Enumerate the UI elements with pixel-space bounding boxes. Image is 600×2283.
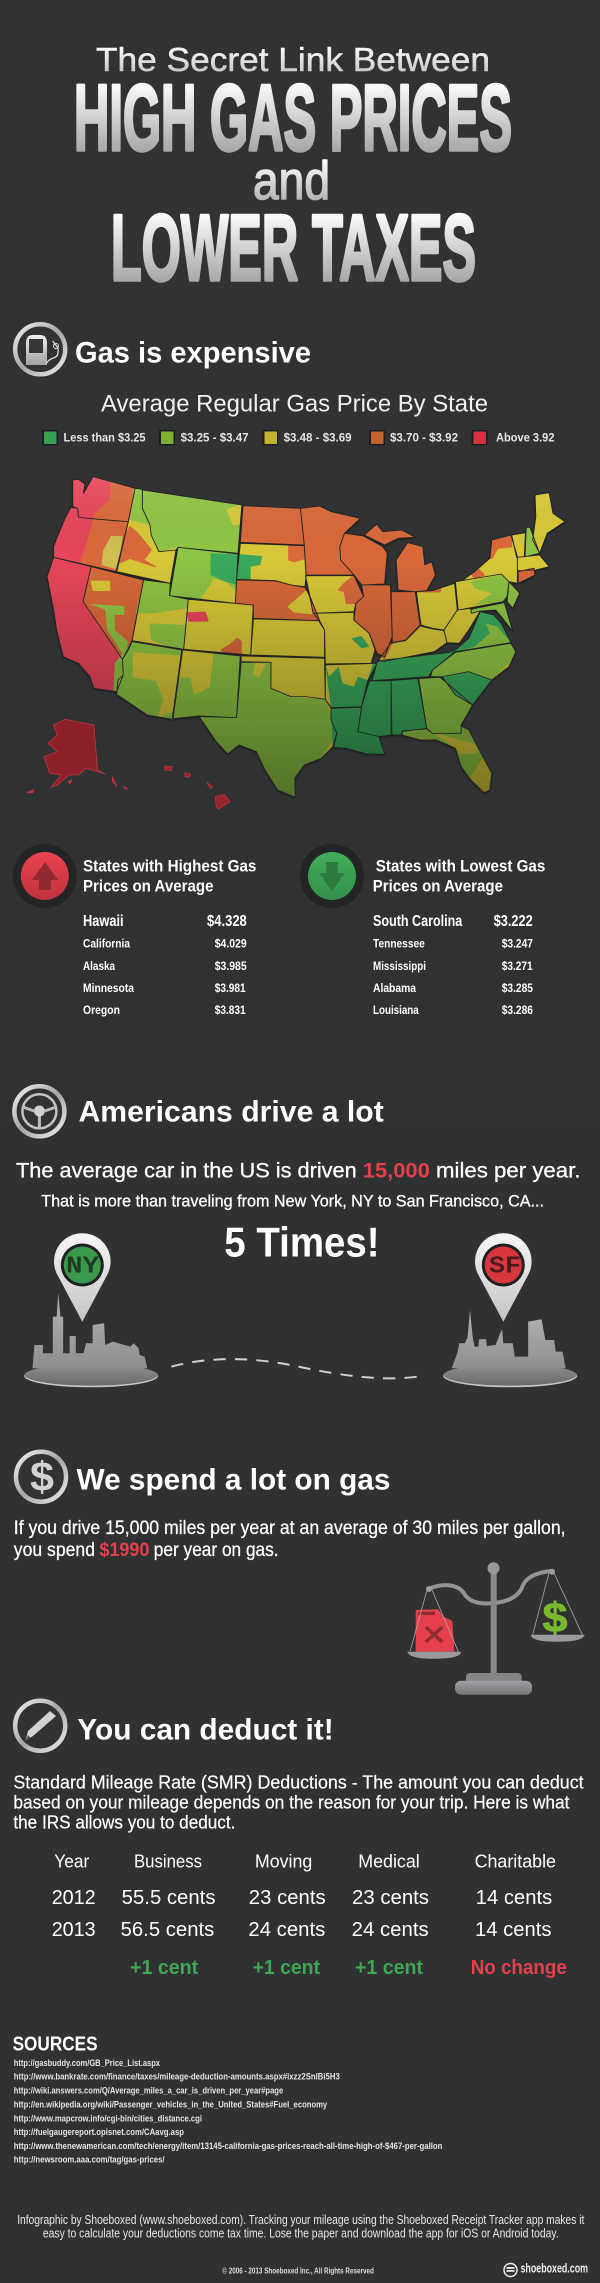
text: annual gas spend: you spend [14, 1540, 95, 1561]
panel: states with lowest gas prices [300, 844, 545, 1017]
table row 2013 [52, 1919, 551, 1941]
list: lowest states and prices: $3.285 [502, 981, 533, 995]
legend item: above 3.92: Above 3.92 [496, 430, 555, 444]
logo: shoeboxed [504, 2262, 588, 2276]
heading: we spend a lot on gas: We spend a lot on gas [76, 1463, 390, 1496]
heading: sources: SOURCES [13, 2034, 98, 2056]
heading: highest gas prices [83, 857, 256, 896]
icon: ny map pin: NY [66, 1254, 100, 1280]
map title: Average Regular Gas Price By State [101, 391, 488, 418]
icon: red gas can [416, 1609, 454, 1652]
legend item: 3.48 to 3.69: $3.48 - $3.69 [284, 430, 352, 444]
table header row: Charitable [475, 1851, 556, 1871]
list: lowest states and prices: $3.247 [502, 937, 533, 951]
list: highest states and prices: Minnesota [83, 981, 134, 995]
panel: sources [13, 2034, 442, 2165]
legend item: 3.25 to 3.47 [159, 430, 249, 446]
text: average car driven miles: miles per year. [436, 1159, 580, 1182]
icon: pencil [15, 1701, 65, 1751]
list: source urls: http://gasbuddy.com/GB_Price_List.aspx [14, 2058, 160, 2068]
heading: highest gas prices: Prices on Average [83, 877, 214, 896]
icon: red up arrow button [13, 844, 77, 908]
list: highest states and prices: $3.831 [215, 1003, 246, 1017]
title [74, 41, 512, 300]
legend item: less than 3.25: Less than $3.25 [64, 430, 146, 444]
map: us gas prices by state [26, 476, 566, 810]
icon: ny map pin [54, 1233, 111, 1322]
illustration: balance scale [407, 1562, 585, 1695]
list: source urls: http://www.bankrate.com/finance/taxes/mileage-deduction-amounts.aspx#ixzz2SnlBi5H3 [14, 2072, 340, 2082]
heading: gas is expensive: Gas is expensive [75, 337, 311, 370]
legend item: above 3.92 [472, 430, 555, 446]
panel: gas is expensive [12, 322, 566, 810]
legend item: 3.48 to 3.69 [262, 430, 352, 446]
illustration: new york skyline [24, 1293, 158, 1387]
list: lowest states and prices: Alabama [373, 981, 416, 995]
list: highest states and prices: $3.985 [215, 959, 247, 973]
text: standard mileage rate explanation: based on your mileage depends on the reason for your trip. Here is what [13, 1792, 569, 1812]
list: source urls: http://fuelgaugereport.opisnet.com/CAavg.asp [14, 2127, 184, 2137]
text: shoeboxed credit [17, 2212, 585, 2240]
text: average car driven miles: The average car in the US is driven [16, 1159, 357, 1182]
table row change [130, 1957, 567, 1979]
text: annual gas spend: $1990 [100, 1540, 149, 1561]
icon: gas pump [15, 324, 65, 374]
legend item: less than 3.25 [42, 430, 146, 446]
table row 2012 [52, 1887, 552, 1909]
illustration: san francisco skyline [443, 1310, 577, 1387]
list: highest states and prices: Alaska [83, 959, 115, 973]
arrow: dashed route [171, 1359, 418, 1378]
table row 2013: 2013 [52, 1919, 96, 1941]
text: 5 times: 5 Times! [224, 1219, 380, 1266]
table header row: Medical [358, 1851, 420, 1871]
list: lowest states and prices: $3.286 [502, 1003, 533, 1017]
text: standard mileage rate explanation [13, 1772, 584, 1832]
list: source urls: http://wiki.answers.com/Q/Average_miles_a_car_is_driven_per_year#page [14, 2086, 283, 2096]
text: standard mileage rate explanation: the IRS allows you to deduct. [13, 1812, 235, 1832]
heading: lowest gas prices [373, 857, 545, 896]
table row 2013: 14 cents [475, 1919, 552, 1941]
list: lowest states and prices: South Carolina [373, 913, 463, 930]
icon: dollar sign [16, 1452, 66, 1502]
list: lowest states and prices: $3.222 [494, 913, 533, 930]
text: copyright: © 2006 - 2013 Shoeboxed Inc., All Rights Reserved [222, 2265, 374, 2275]
list: source urls: http://en.wikipedia.org/wiki/Passenger_vehicles_in_the_United_States#Fuel_economy [14, 2100, 327, 2110]
panel: states with highest gas prices [13, 844, 256, 1017]
text: annual gas spend [14, 1518, 566, 1561]
list: highest states and prices: $4.029 [215, 937, 247, 951]
list: source urls [14, 2058, 442, 2165]
text: standard mileage rate explanation: Standard Mileage Rate (SMR) Deductions - The amount you can deduct [13, 1772, 584, 1792]
panel: we spend a lot on gas [14, 1452, 585, 1695]
icon: dollar sign: $ [30, 1453, 54, 1500]
list: lowest states and prices [373, 913, 533, 1017]
title line: the secret link between: The Secret Link Between [96, 41, 490, 78]
list: source urls: http://newsroom.aaa.com/tag/gas-prices/ [14, 2155, 165, 2165]
table row 2012: 55.5 cents [122, 1887, 216, 1909]
list: source urls: http://www.thenewamerican.com/tech/energy/item/13145-california-gas-prices-reach-all-time-high-of-$467-per-gallon [14, 2141, 442, 2151]
map: alaska [44, 719, 105, 787]
table row change: No change [471, 1957, 567, 1979]
table header row: Moving [255, 1851, 312, 1871]
icon: sf map pin: SF [489, 1254, 521, 1280]
list: lowest states and prices: Louisiana [373, 1003, 419, 1017]
map: hawaii [165, 766, 230, 809]
icon: green down arrow button [300, 844, 364, 908]
table header row [54, 1851, 556, 1871]
legend [42, 430, 555, 446]
text: annual gas spend: per year on gas. [154, 1540, 279, 1561]
table row change: +1 cent [355, 1957, 423, 1979]
table row 2013: 56.5 cents [121, 1919, 214, 1941]
table row 2012: 14 cents [476, 1887, 552, 1909]
legend item: 3.70 to 3.92 [369, 430, 458, 446]
icon: steering wheel [14, 1086, 64, 1136]
list: lowest states and prices: $3.271 [502, 959, 533, 973]
list: lowest states and prices: Mississippi [373, 959, 426, 973]
heading: americans drive a lot: Americans drive a lot [78, 1096, 384, 1129]
heading: you can deduct it: You can deduct it! [77, 1713, 334, 1746]
list: highest states and prices: Hawaii [83, 913, 124, 930]
legend item: 3.70 to 3.92: $3.70 - $3.92 [390, 430, 458, 444]
table header row: Year [54, 1851, 89, 1871]
text: new york to san francisco: That is more than traveling from New York, NY to San Francisco, CA... [41, 1192, 544, 1211]
list: highest states and prices: Oregon [83, 1003, 120, 1017]
heading: lowest gas prices: States with Lowest Gas [376, 857, 545, 876]
list: highest states and prices: California [83, 937, 130, 951]
map: alaska islands [27, 777, 127, 793]
table row change: +1 cent [130, 1957, 199, 1979]
title line: and: and [253, 151, 330, 211]
heading: lowest gas prices: Prices on Average [373, 877, 503, 896]
table row change: +1 cent [253, 1957, 320, 1979]
table row 2013: 24 cents [352, 1919, 429, 1941]
table row 2012: 2012 [52, 1887, 96, 1909]
text: annual gas spend: If you drive 15,000 miles per year at an average of 30 miles per gallon, [14, 1518, 566, 1539]
table row 2013: 24 cents [248, 1919, 325, 1941]
icon: green dollar sign: $ [542, 1594, 568, 1641]
table row 2012: 23 cents [352, 1887, 429, 1909]
table row 2012: 23 cents [249, 1887, 326, 1909]
text: average car driven miles [16, 1159, 580, 1182]
list: highest states and prices: $4.328 [207, 913, 247, 930]
panel: footer [17, 2212, 588, 2276]
heading: highest gas prices: States with Highest Gas [83, 857, 256, 876]
list: lowest states and prices: Tennessee [373, 937, 425, 951]
table: mileage rates [52, 1851, 567, 1979]
list: source urls: http://www.mapcrow.info/cgi-bin/cities_distance.cgi [14, 2114, 202, 2124]
panel: you can deduct it [13, 1701, 584, 1979]
icon: sf map pin [475, 1233, 532, 1322]
table header row: Business [134, 1851, 202, 1871]
panel: americans drive a lot [14, 1086, 580, 1387]
text: average car driven miles: 15,000 [363, 1159, 430, 1182]
legend item: 3.25 to 3.47: $3.25 - $3.47 [181, 430, 249, 444]
list: highest states and prices [83, 913, 247, 1017]
list: highest states and prices: $3.981 [215, 981, 246, 995]
